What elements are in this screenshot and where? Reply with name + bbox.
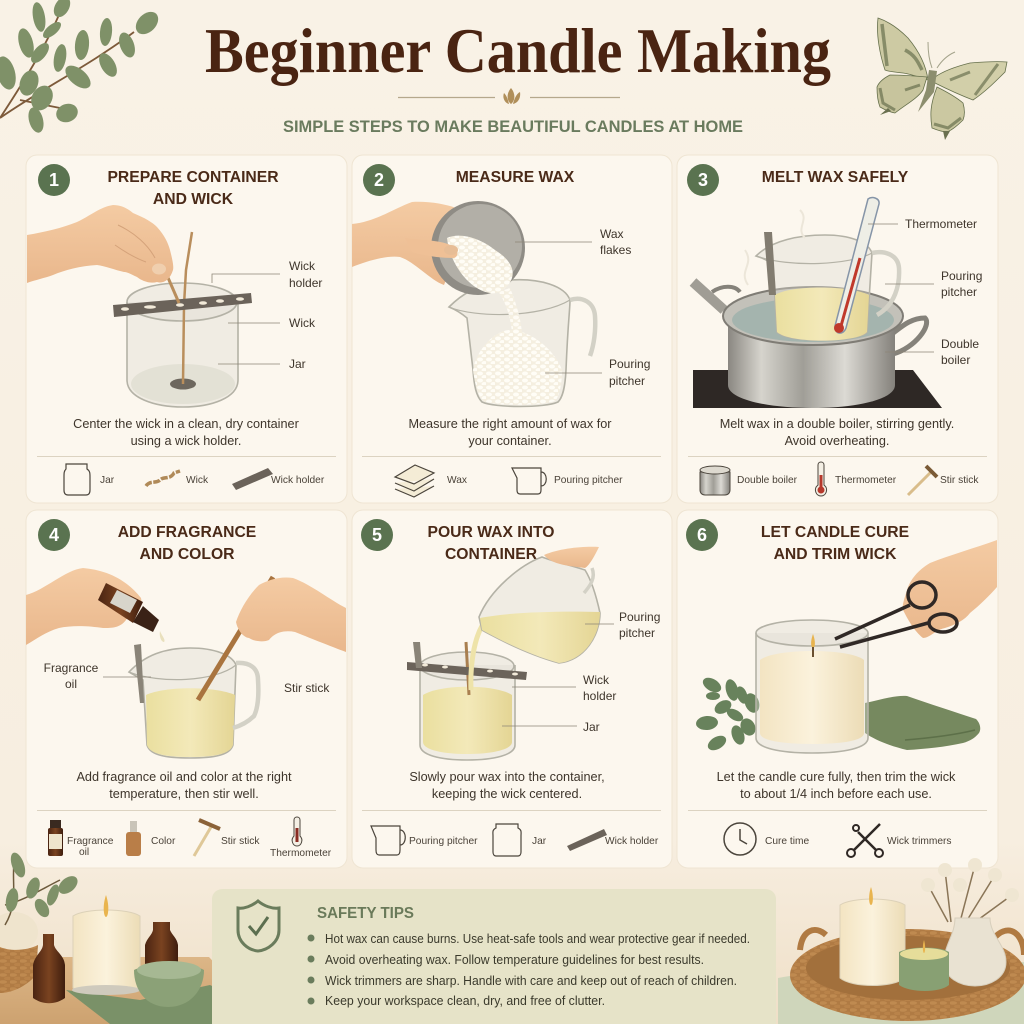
instruction text: Avoid overheating. xyxy=(785,434,889,448)
supplies row: Stir stick xyxy=(940,475,979,486)
heading 4: AND COLOR xyxy=(140,546,234,563)
supplies row: Pouring pitcher xyxy=(409,836,478,847)
panel: step 5 xyxy=(352,510,672,868)
callout labels: holder xyxy=(583,689,616,703)
callout labels: Thermometer xyxy=(905,217,977,231)
callout labels: Pouring xyxy=(609,357,650,371)
callout labels: flakes xyxy=(600,243,631,257)
illustration: finished candle and wick trimmers xyxy=(695,540,997,753)
callout labels: Wick xyxy=(289,259,315,273)
illustration: pouring wax flakes into pitcher xyxy=(352,201,595,406)
callout labels: Jar xyxy=(583,720,600,734)
callout labels: Wick xyxy=(583,673,609,687)
instruction text: using a wick holder. xyxy=(131,434,241,448)
callout labels: pitcher xyxy=(619,626,655,640)
icon: shield with check xyxy=(238,901,279,951)
instruction text: Add fragrance oil and color at the right xyxy=(76,770,292,784)
callout labels: boiler xyxy=(941,353,970,367)
panel: safety tips xyxy=(212,889,776,1024)
title: Beginner Candle Making xyxy=(205,15,831,86)
callout labels: Double xyxy=(941,337,979,351)
panel: step 3 xyxy=(677,155,998,503)
illustration: double boiler xyxy=(693,198,942,408)
supplies row: Wax xyxy=(447,475,467,486)
instruction text: Center the wick in a clean, dry container xyxy=(73,417,299,431)
illustration: pouring wax into jar xyxy=(407,547,600,760)
panel: step 6 xyxy=(677,510,998,868)
callout labels: Wax xyxy=(600,227,624,241)
heading 5: CONTAINER xyxy=(445,546,537,563)
subtitle: SIMPLE STEPS TO MAKE BEAUTIFUL CANDLES AT HOME xyxy=(283,117,743,136)
step number 3 xyxy=(687,164,719,196)
heading 6: AND TRIM WICK xyxy=(774,546,897,563)
instruction text: temperature, then stir well. xyxy=(109,787,259,801)
callout labels: pitcher xyxy=(609,374,645,388)
step number 3: 3 xyxy=(698,170,708,190)
supplies row: Thermometer xyxy=(835,475,897,486)
decorative eucalyptus branch xyxy=(0,0,163,134)
callout labels xyxy=(502,610,660,734)
supplies row: Cure time xyxy=(765,836,809,847)
supplies row: Jar xyxy=(532,836,547,847)
heading 1: PREPARE CONTAINER xyxy=(107,169,279,186)
callout labels xyxy=(868,217,982,367)
step number 6: 6 xyxy=(697,525,707,545)
tip list: Avoid overheating wax. Follow temperature guidelines for best results. xyxy=(325,953,704,967)
supplies row: Wick xyxy=(186,475,209,486)
step number 4: 4 xyxy=(49,525,59,545)
ornament divider xyxy=(398,88,620,104)
tip list: Keep your workspace clean, dry, and free of clutter. xyxy=(325,994,605,1008)
callout labels xyxy=(212,259,322,371)
callout labels xyxy=(515,227,650,388)
heading 5: POUR WAX INTO xyxy=(428,524,554,541)
tip list xyxy=(308,932,750,1008)
panel: step 2 xyxy=(352,155,672,503)
heading 3: MELT WAX SAFELY xyxy=(762,169,909,186)
supplies row: Wick holder xyxy=(605,836,659,847)
tip list: Hot wax can cause burns. Use heat-safe tools and wear protective gear if needed. xyxy=(325,932,750,946)
illustration: adding fragrance oil xyxy=(26,568,346,758)
step number 5: 5 xyxy=(372,525,382,545)
step number 4 xyxy=(38,519,70,551)
supplies row xyxy=(724,823,952,857)
icon: folded-note butterfly xyxy=(877,18,1007,140)
step number 5 xyxy=(361,519,393,551)
callout labels: Pouring xyxy=(619,610,660,624)
step number 6 xyxy=(686,519,718,551)
instruction text: Melt wax in a double boiler, stirring gently. xyxy=(720,417,954,431)
callout labels xyxy=(44,661,330,695)
step number 2 xyxy=(363,164,395,196)
heading: safety tips: SAFETY TIPS xyxy=(317,905,414,922)
heading 6: LET CANDLE CURE xyxy=(761,524,909,541)
instruction text: to about 1/4 inch before each use. xyxy=(740,787,932,801)
supplies row xyxy=(395,465,623,497)
instruction text: Let the candle cure fully, then trim the wick xyxy=(717,770,955,784)
supplies row xyxy=(700,462,979,496)
step number 2: 2 xyxy=(374,170,384,190)
supplies row xyxy=(371,824,659,856)
heading 1: AND WICK xyxy=(153,191,234,208)
supplies row: Wick trimmers xyxy=(887,836,952,847)
heading 4: ADD FRAGRANCE xyxy=(118,524,256,541)
instruction text: keeping the wick centered. xyxy=(432,787,582,801)
callout labels: Fragrance xyxy=(44,661,98,675)
callout labels: Jar xyxy=(289,357,306,371)
supplies row: Wick holder xyxy=(271,475,325,486)
panel: step 4 xyxy=(26,510,347,868)
callout labels: holder xyxy=(289,276,322,290)
callout labels: oil xyxy=(65,677,77,691)
instruction text: Slowly pour wax into the container, xyxy=(409,770,605,784)
panel: step 1 xyxy=(26,155,347,503)
supplies row: Pouring pitcher xyxy=(554,475,623,486)
callout labels: pitcher xyxy=(941,285,977,299)
heading 2: MEASURE WAX xyxy=(456,169,575,186)
supplies row: Color xyxy=(151,836,176,847)
illustration: hand, jar and wick xyxy=(27,205,252,407)
tip list: Wick trimmers are sharp. Handle with care and keep out of reach of children. xyxy=(325,974,737,988)
supplies row: oil xyxy=(79,847,89,858)
supplies row xyxy=(64,464,325,495)
callout labels: Stir stick xyxy=(284,681,330,695)
instruction text: Measure the right amount of wax for xyxy=(408,417,612,431)
supplies row: Double boiler xyxy=(737,475,798,486)
step number 1 xyxy=(38,164,70,196)
supplies row: Jar xyxy=(100,475,115,486)
supplies row: Stir stick xyxy=(221,836,260,847)
callout labels: Wick xyxy=(289,316,316,330)
supplies row xyxy=(48,817,332,859)
decor: right basket with candles xyxy=(778,858,1024,1024)
supplies row: Thermometer xyxy=(270,848,332,859)
callout labels: Pouring xyxy=(941,269,982,283)
supplies row: Fragrance xyxy=(67,836,113,847)
instruction text: your container. xyxy=(468,434,552,448)
step number 1: 1 xyxy=(49,170,59,190)
decor: left tabletop still life xyxy=(0,851,255,1024)
